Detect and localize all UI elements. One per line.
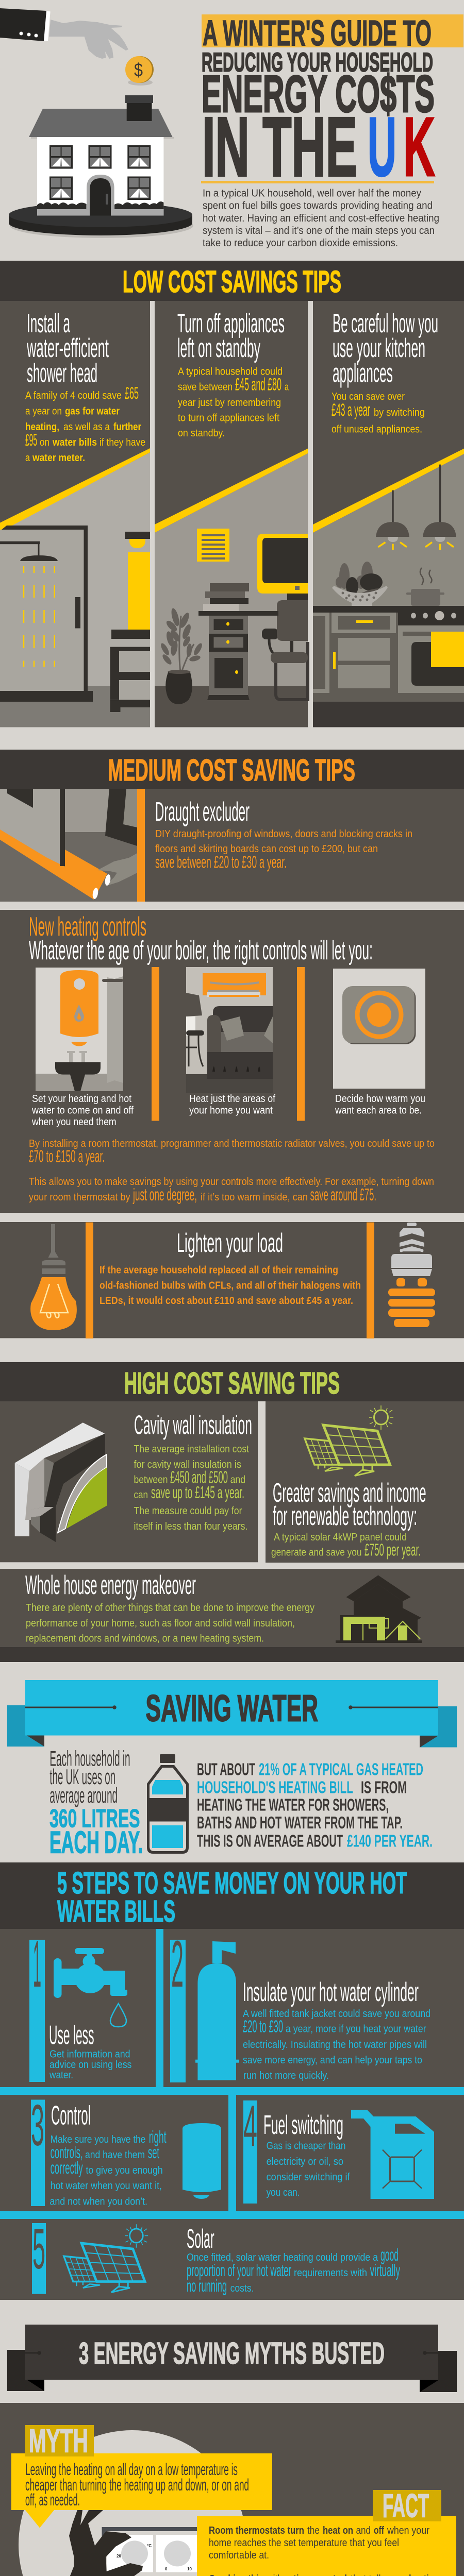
callout: fact: Room thermostats turn [209, 2525, 304, 2536]
intro text: take to reduce your carbon dioxide emissions. [203, 238, 398, 249]
icon: hand turning dial [44, 2510, 143, 2576]
body text: £95 [25, 431, 37, 449]
heading: shower head [27, 359, 97, 388]
icon: coin [125, 56, 154, 86]
captions: want each area to be. [335, 1105, 422, 1116]
step 3: control: to give you enough [86, 2165, 163, 2176]
text: water heating share: THIS IS ON AVERAGE ABOUT [197, 1831, 343, 1850]
step 1: use less: Get information and [49, 2048, 130, 2060]
panel: shower head: water-efficient [27, 333, 109, 363]
body text: just one degree, [132, 1185, 197, 1204]
icon: coin: $ [134, 59, 143, 80]
step 2: insulate cylinder: electrically. Insulating the hot water pipes will [243, 2039, 427, 2050]
divider [152, 967, 159, 1121]
step 5: solar: good [380, 2245, 399, 2264]
body text: The measure could pay for [134, 1505, 242, 1517]
illustration: thermostat [333, 969, 425, 1089]
step 5: solar: proportion of your hot water [187, 2261, 291, 2280]
body text [25, 384, 145, 464]
stat: 360 litres each day: Each household in [49, 1747, 130, 1771]
step 5: solar: 5 [32, 2217, 45, 2281]
callout: myth: MYTH [29, 2422, 88, 2460]
body text [26, 1602, 314, 1645]
panel: whole house energy makeover [0, 1569, 464, 1662]
step 3: control: set [148, 2143, 159, 2162]
body text: gas for water [65, 406, 120, 417]
body text: The average installation cost [134, 1444, 249, 1455]
heading band: low cost savings tips [0, 261, 464, 301]
body text: There are plenty of other things that can be done to improve the energy [26, 1602, 314, 1614]
panel: renewable technology [266, 1401, 464, 1563]
ribbon: 3 energy saving myths busted [7, 2325, 457, 2392]
body text: if it’s too warm inside, can [201, 1192, 308, 1203]
body text: as well as a [63, 421, 110, 433]
icon: water tank [183, 2123, 221, 2199]
captions: water to come on and off [31, 1105, 134, 1116]
body text [100, 1265, 361, 1307]
panel: standby appliances: Turn off appliances [177, 309, 285, 338]
callout: fact: off [374, 2525, 384, 2536]
lower part: myths, references and footer [0, 2403, 464, 2576]
step 3: control: Control [51, 2100, 91, 2130]
body text [271, 1532, 421, 1560]
heading: appliances [333, 359, 393, 388]
stat: 360 litres each day [49, 1747, 143, 1860]
step 2: insulate cylinder: A well fitted tank jacket could save you around [243, 2008, 430, 2020]
intro text: spent on fuel bills goes towards providing heating and [203, 200, 433, 212]
text: water heating share [197, 1760, 433, 1850]
panel: whole house energy makeover: Whole house energy makeover [25, 1570, 196, 1600]
body text: old-fashioned bulbs with CFLs, and all of their halogens with [100, 1280, 361, 1292]
illustration: kitchen units and oven [313, 562, 464, 727]
callout: myth [11, 2422, 272, 2528]
illustration: thermostat dials: 10 [187, 2567, 192, 2571]
callout: fact: heat on [323, 2525, 353, 2536]
body text [29, 1138, 435, 1204]
callout: fact: comfortable at. [209, 2550, 269, 2561]
body text: for cavity wall insulation is [134, 1459, 241, 1470]
body text: DIY draught-proofing of windows, doors and blocking cracks in [155, 828, 412, 840]
heading band: medium cost saving tips [0, 750, 464, 789]
step 3: control: controls, [51, 2143, 83, 2162]
body text: £45 and £80 [235, 375, 281, 395]
icon: hot water cylinder [195, 1941, 239, 2080]
step 1: use less: advice on using less [49, 2059, 131, 2071]
step 3: control: and not when you don’t. [49, 2196, 147, 2207]
body text: floors and skirting boards can cost up to £200, but can [155, 843, 378, 855]
illustration: thermostat dials: 0 [165, 2567, 168, 2571]
ribbon: saving water: SAVING WATER [145, 1688, 318, 1729]
body text: heating, [25, 421, 59, 433]
step 2: insulate cylinder [170, 1927, 430, 2082]
title: K [403, 99, 435, 194]
step 5: solar: no running [187, 2276, 227, 2295]
icon: solar panels [305, 1405, 393, 1476]
body text [134, 1444, 249, 1532]
panel: cavity wall insulation [0, 1401, 258, 1562]
stat: 360 litres each day: the UK uses on [49, 1765, 115, 1789]
panel: new heating controls [0, 910, 464, 1213]
divider [297, 967, 305, 1121]
step 4: fuel switching [243, 2093, 434, 2204]
stat: 360 litres each day: EACH DAY. [49, 1825, 143, 1860]
heading [273, 1478, 426, 1531]
step 1: use less [29, 1927, 131, 2082]
body text: can [134, 1489, 148, 1501]
body text [178, 366, 289, 439]
heading band: 5 steps: WATER BILLS [57, 1894, 175, 1928]
heading: Install a [27, 309, 70, 338]
callout: myth: Leaving the heating on all day on a low temperature is [25, 2460, 238, 2479]
step 3: control: 3 [31, 2093, 44, 2158]
intro text: system is vital – and it’s one of the main steps you can [203, 225, 435, 236]
callout: fact: when your [387, 2525, 429, 2536]
captions [31, 1093, 425, 1128]
body text: replacement doors and windows, or a new heating system. [26, 1633, 264, 1645]
body text: £70 to £150 a year. [29, 1146, 105, 1165]
step 2: insulate cylinder: a year, more if you heat your water [286, 2024, 426, 2035]
step 1: use less: Use less [49, 2021, 94, 2050]
illustration: thermostat dials: 20 [117, 2554, 121, 2558]
body text: A typical household could [178, 366, 283, 378]
text: water heating share: IS FROM [361, 1777, 407, 1797]
step 5: solar: requirements with [294, 2267, 367, 2279]
step 4: fuel switching: Gas is cheaper than [267, 2141, 345, 2152]
captions: Heat just the areas of [189, 1093, 275, 1105]
body text: save between [178, 382, 233, 393]
icon: fuel can [351, 2110, 434, 2199]
step 3: control: Make sure you have the [51, 2134, 145, 2145]
body text: and [230, 1474, 245, 1485]
icon: house on platform [9, 95, 193, 238]
callout: myth: cheaper than turning the heating up and down, or on and [25, 2476, 249, 2494]
heading band: high cost saving tips [0, 1362, 464, 1401]
body text: save around £75. [310, 1185, 376, 1204]
text: water heating share: HOUSEHOLD'S HEATING BILL [197, 1777, 353, 1797]
panel: draught excluder: Draught excluder [155, 797, 250, 827]
body text: A family of 4 could save [25, 390, 122, 401]
body text: further [113, 421, 141, 433]
icon: tap [54, 1948, 127, 1998]
step 2: insulate cylinder: save more energy, and can help your taps to [243, 2055, 422, 2066]
intro text [203, 188, 439, 249]
step 3: control: and have them [85, 2149, 145, 2161]
step 5: solar: Once fitted, solar water heating could provide a [187, 2252, 378, 2263]
panel: new heating controls: New heating controls [29, 912, 146, 942]
callout: fact: and [356, 2525, 371, 2536]
heading [27, 309, 109, 388]
callout: fact: home reaches the set temperature that you feel [209, 2537, 399, 2549]
callout: fact: the [307, 2525, 320, 2536]
body text: £65 [125, 384, 139, 402]
body text: £450 and £500 [170, 1467, 228, 1486]
illustration: hand dropping coin into house [0, 8, 193, 238]
upper part: savings tips and hot water steps: Cavity wall insulation [134, 1411, 252, 1440]
icon: water bottle [147, 1754, 189, 1854]
step 5: solar: costs. [230, 2283, 254, 2294]
body text: on [40, 437, 49, 448]
myth 1: heating on all day [11, 2422, 456, 2576]
illustration: boiler and bathroom [36, 968, 123, 1091]
intro text: hot water. Having an efficient and cost-effective heating [203, 213, 439, 224]
body text: LEDs, it would cost about £110 and save about £45 a year. [100, 1295, 353, 1307]
step 2: insulate cylinder: 2 [171, 1927, 184, 2001]
panel: shower head [0, 301, 150, 727]
step 2: insulate cylinder: run hot more quickly. [243, 2070, 329, 2081]
heading: left on standby [177, 333, 260, 363]
body text: You can save over [332, 391, 405, 402]
intro text: In a typical UK household, well over half the money [203, 188, 421, 199]
stat: 360 litres each day: average around [49, 1783, 118, 1807]
step 5: solar: Solar [187, 2224, 214, 2254]
body text [332, 391, 425, 435]
body text: performance of your home, such as floor and solid wall insulation, [26, 1618, 295, 1629]
panel: steps background [0, 1929, 464, 2300]
body text: to turn off appliances left [178, 413, 279, 424]
stat: 360 litres each day: 360 LITRES [49, 1804, 140, 1833]
text: water heating share: BUT ABOUT [197, 1760, 255, 1779]
lower page background [0, 2403, 464, 2576]
illustration: wall cross-section [15, 1422, 107, 1542]
step 4: fuel switching: you can. [267, 2187, 300, 2198]
callout: myth: off, as needed. [25, 2490, 80, 2509]
panel: kitchen appliances [313, 301, 464, 727]
body text: itself in less than four years. [134, 1521, 247, 1532]
title: U [368, 99, 396, 194]
callout: fact [197, 2487, 456, 2576]
body text: water bills [52, 437, 97, 448]
body text: a year on [25, 406, 62, 417]
step 2: insulate cylinder: £20 to £30 [243, 2017, 283, 2036]
captions: your home you want [189, 1105, 273, 1116]
body text: between [134, 1474, 168, 1485]
icon: solar panels [64, 2224, 148, 2292]
step 4: fuel switching: consider switching if [267, 2172, 350, 2183]
illustration: draught excluder tube [0, 789, 137, 902]
step 4: fuel switching: electricity or oil, so [267, 2156, 343, 2167]
body text: save up to £145 a year. [151, 1483, 244, 1502]
icon: CFL bulb [388, 1223, 435, 1327]
icon: filament bulb [30, 1224, 77, 1330]
body text: off unused appliances. [332, 424, 422, 435]
captions: when you need them [31, 1116, 117, 1128]
heading: Lighten your load [177, 1228, 283, 1258]
step 5: solar: virtually [370, 2261, 400, 2280]
captions: Decide how warm you [335, 1093, 425, 1105]
panel: myths background [0, 2403, 464, 2576]
step 1: use less: water. [49, 2070, 73, 2081]
captions: Set your heating and hot [32, 1093, 131, 1105]
panel: lighten your load [0, 1222, 464, 1338]
step 3: control: hot water when you want it, [51, 2180, 162, 2192]
step 3: control: correctly [51, 2158, 83, 2177]
step 4: fuel switching: Fuel switching [263, 2110, 343, 2140]
body text: by switching [374, 407, 425, 418]
illustration: thermostat dials [102, 2527, 200, 2576]
step 1: use less: 1 [33, 1927, 41, 2001]
illustration: pendant lamps [376, 465, 456, 550]
step 3: control [31, 2093, 221, 2207]
body text: water meter. [32, 452, 85, 464]
body text [155, 828, 412, 871]
icon: sleeve and hand [0, 8, 128, 59]
heading [177, 309, 285, 363]
body text: a [25, 452, 30, 464]
body text: generate and save you [271, 1547, 362, 1558]
icon: house [336, 1575, 422, 1643]
illustration: living room with air con [186, 967, 273, 1093]
illustration: shower and cabinet [0, 526, 150, 727]
step 4: fuel switching: 4 [243, 2093, 257, 2158]
step 5: solar [32, 2217, 400, 2295]
body text: £43 a year [332, 400, 370, 420]
body text: on standby. [178, 428, 225, 439]
body text: save between £20 to £30 a year. [155, 852, 287, 871]
body text: your room thermostat by [29, 1192, 130, 1203]
heading [333, 309, 438, 388]
panel: standby appliances [155, 301, 308, 727]
body text: year just by remembering [178, 397, 281, 409]
body text: if they have [100, 437, 145, 448]
panel: draught excluder [0, 789, 464, 902]
illustration: desk with monitor, plant and chair [155, 529, 308, 727]
heading band: 5 steps [0, 1862, 464, 1929]
title [201, 13, 463, 194]
body text: a [285, 382, 289, 393]
ribbon: saving water [7, 1680, 457, 1748]
body text: A typical solar 4kWP panel could [274, 1532, 407, 1543]
illustration: thermostat dials: °C [147, 2544, 152, 2548]
body text: If the average household replaced all of their remaining [100, 1265, 338, 1276]
step 3: control: right [149, 2127, 167, 2146]
